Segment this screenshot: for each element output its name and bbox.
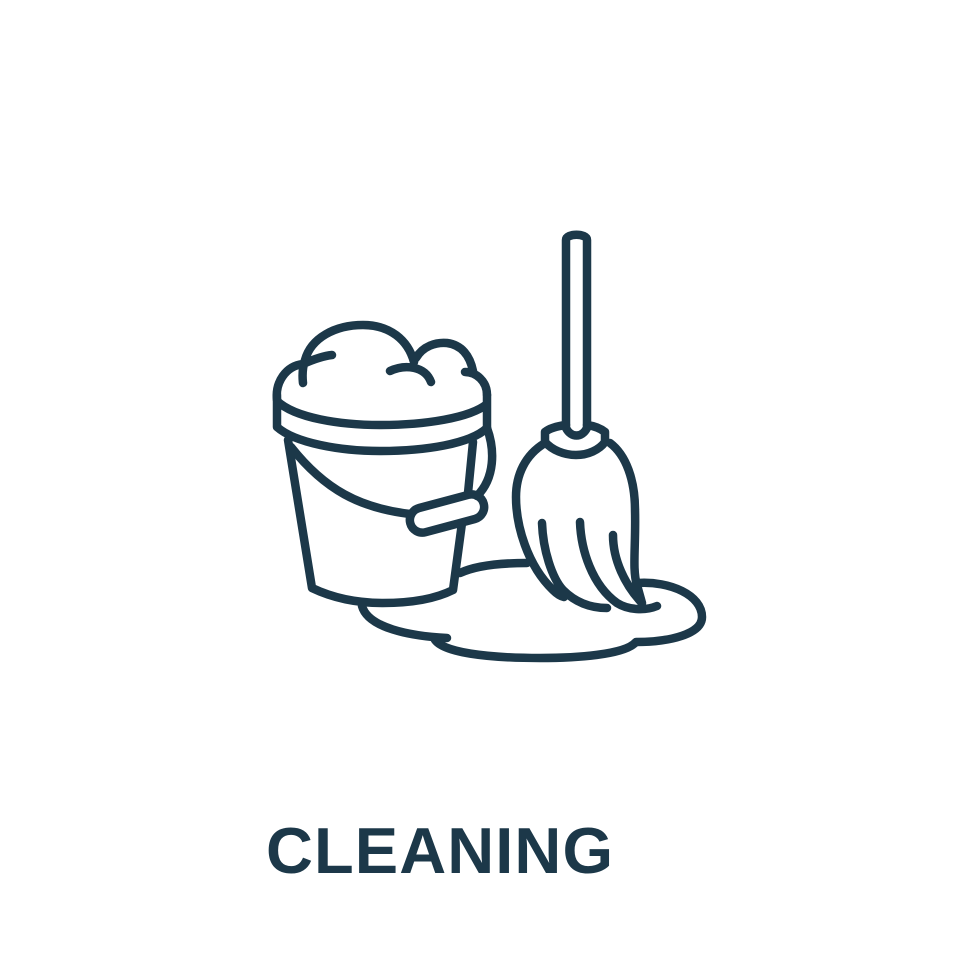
bucket body: [288, 440, 473, 603]
icon: water puddle: [362, 563, 702, 658]
icon: bucket with foam: [277, 325, 492, 603]
mop handle: [566, 235, 587, 436]
mop collar: [545, 425, 605, 455]
title: CLEANING: [266, 814, 613, 887]
icon: mop: [516, 235, 657, 609]
icon: cleaning bucket and mop: [277, 235, 702, 658]
bucket rim: [277, 395, 487, 451]
bucket handle: [291, 428, 492, 514]
foam: [277, 325, 487, 400]
handle grip: [407, 492, 487, 535]
mop strands: [516, 443, 657, 609]
